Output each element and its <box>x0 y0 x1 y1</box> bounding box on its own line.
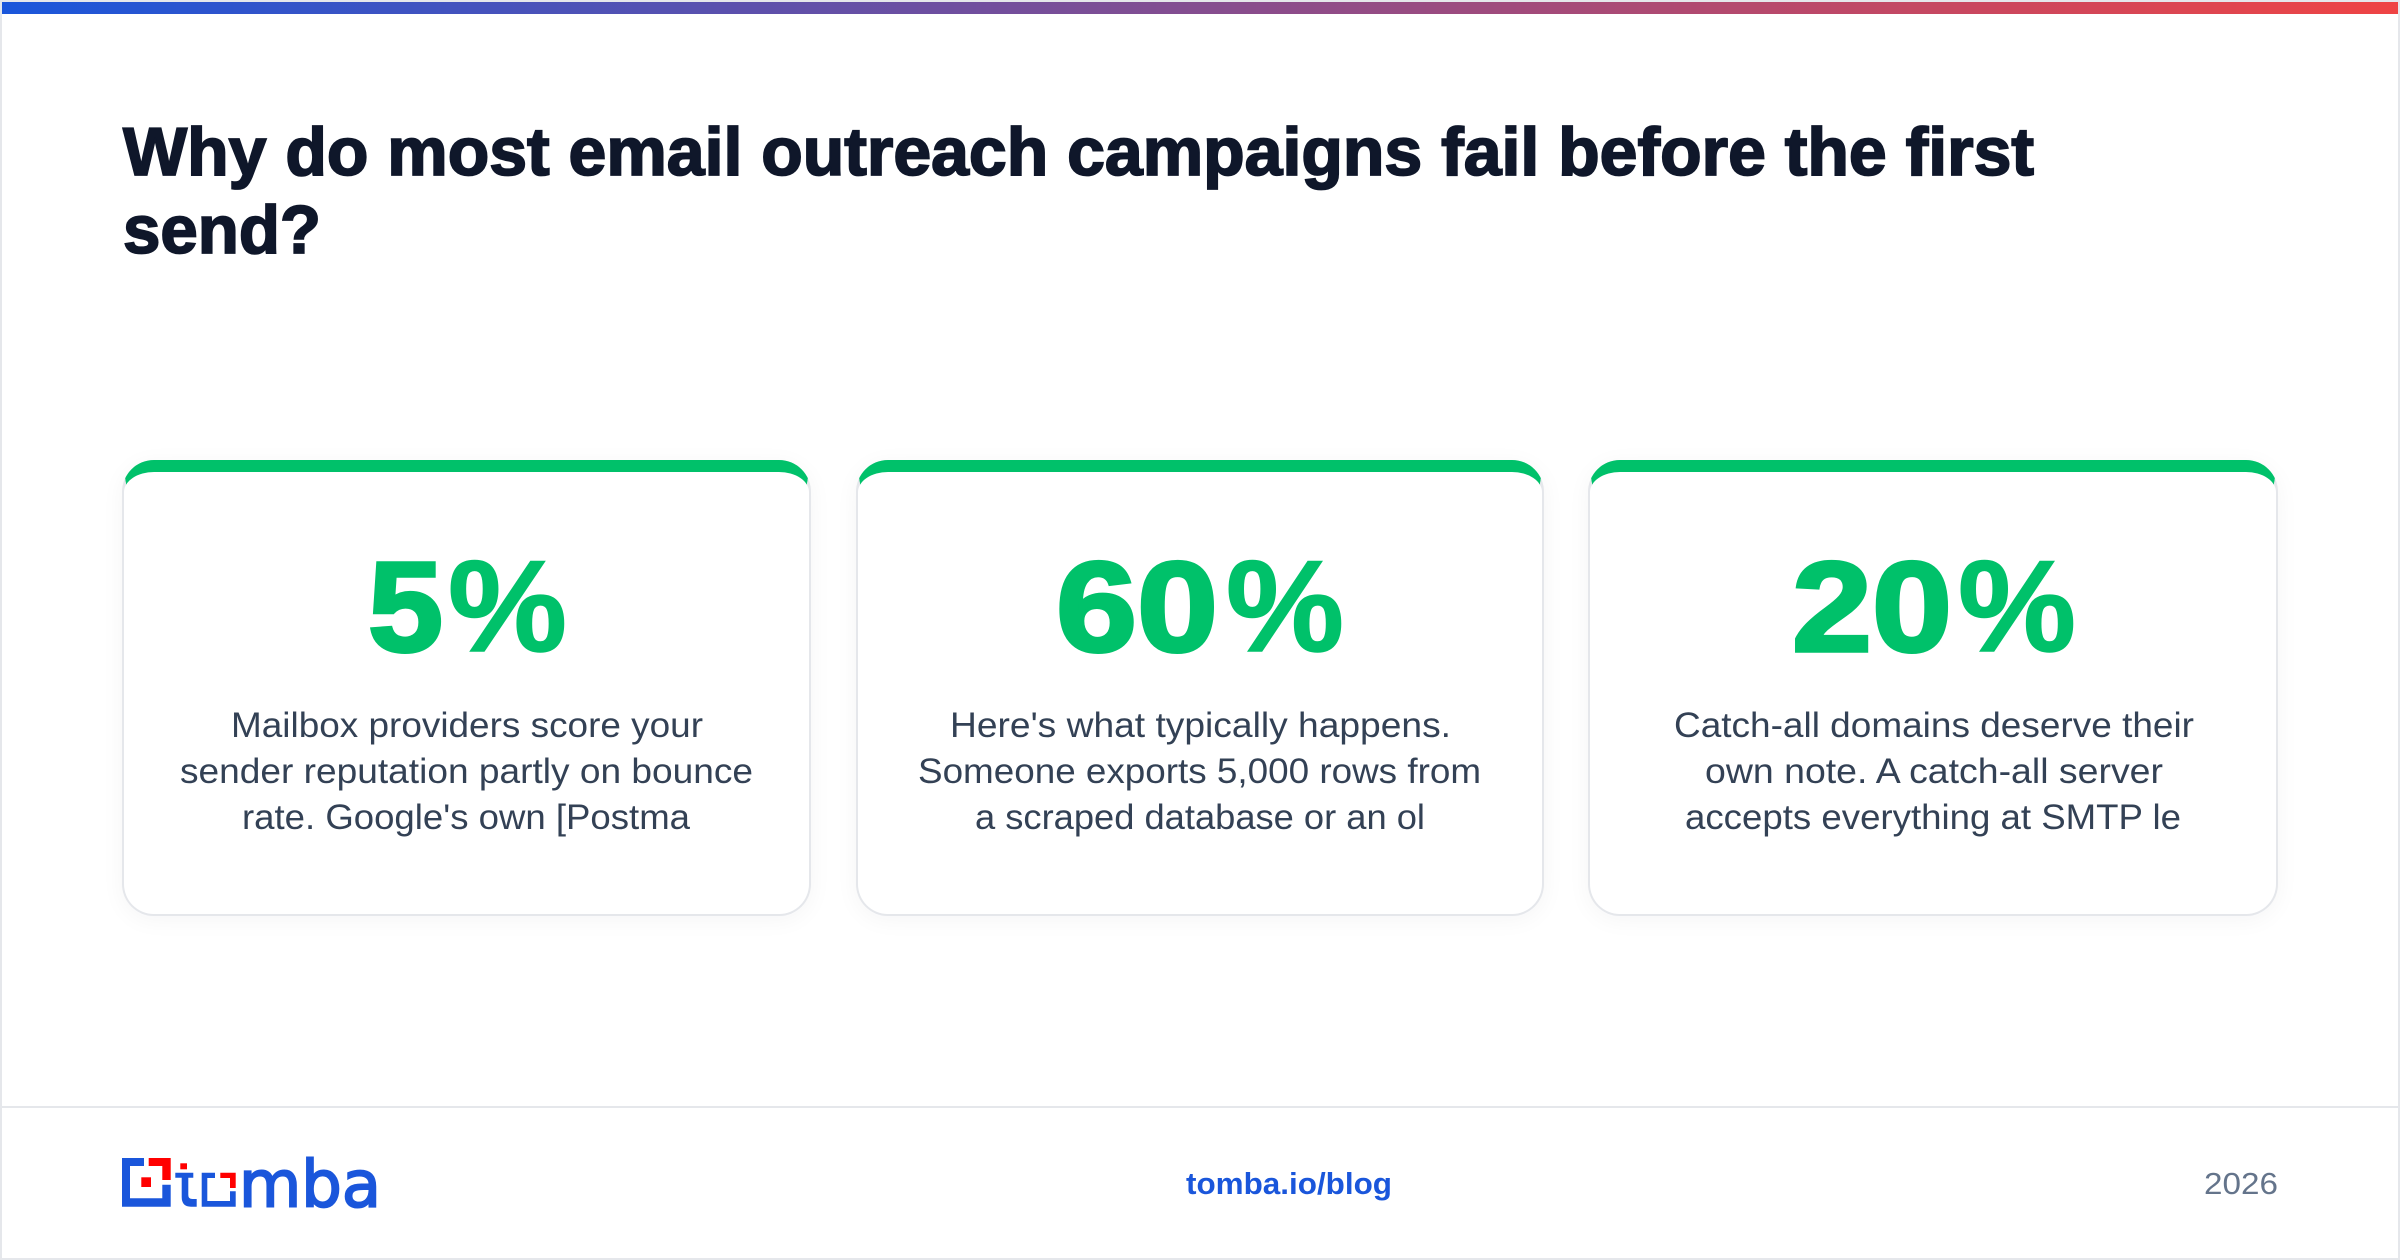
panel: stat card 20% <box>1588 460 2278 916</box>
logo mark red dot <box>141 1177 151 1187</box>
card description text <box>1674 705 2194 837</box>
title <box>122 114 2034 268</box>
card description text: a scraped database or an ol <box>975 797 1425 837</box>
title: Why do most email outreach campaigns fail before the first <box>123 114 2034 190</box>
logo mark red bracket <box>149 1158 171 1180</box>
stat number 20%: % <box>1958 533 2076 679</box>
footer link: tomba.io/blog <box>1186 1166 1392 1201</box>
stat number 5% <box>368 533 567 679</box>
card description text: own note. A catch-all server <box>1705 751 2163 791</box>
stat number 20%: 20 <box>1792 536 1952 679</box>
card description text: Here's what typically happens. <box>950 705 1451 745</box>
card description text <box>180 705 753 837</box>
footer year: 2026 <box>2204 1166 2278 1201</box>
stat number 60%: % <box>1226 533 1344 679</box>
footer logo: tomba <box>122 1149 381 1223</box>
logo letter o red part <box>220 1173 236 1188</box>
card description text: Mailbox providers score your <box>231 705 703 745</box>
stat number 5%: 5 <box>368 536 443 679</box>
stat number 20% <box>1792 533 2076 679</box>
stat number 5%: % <box>448 533 567 679</box>
logo letter t red dot <box>180 1163 187 1169</box>
logo wordmark mba: mba <box>239 1149 381 1223</box>
logo mark blue bracket <box>122 1158 171 1207</box>
panel: stat card 5% <box>122 460 811 916</box>
card description text: Someone exports 5,000 rows from <box>918 751 1481 791</box>
top gradient bar <box>2 2 2398 14</box>
card description text: Catch-all domains deserve their <box>1674 705 2194 745</box>
footer divider <box>2 1106 2398 1108</box>
title: send? <box>123 192 321 268</box>
logo letter t <box>175 1173 197 1207</box>
card description text <box>918 705 1481 837</box>
card description text: rate. Google's own [Postma <box>242 797 690 837</box>
card description text: sender reputation partly on bounce <box>180 751 753 791</box>
panel: stat card 60% <box>856 460 1544 916</box>
stat number 60% <box>1056 533 1344 679</box>
logo letter o blue part <box>202 1173 236 1207</box>
stat number 60%: 60 <box>1056 536 1218 679</box>
card description text: accepts everything at SMTP le <box>1685 797 2181 837</box>
